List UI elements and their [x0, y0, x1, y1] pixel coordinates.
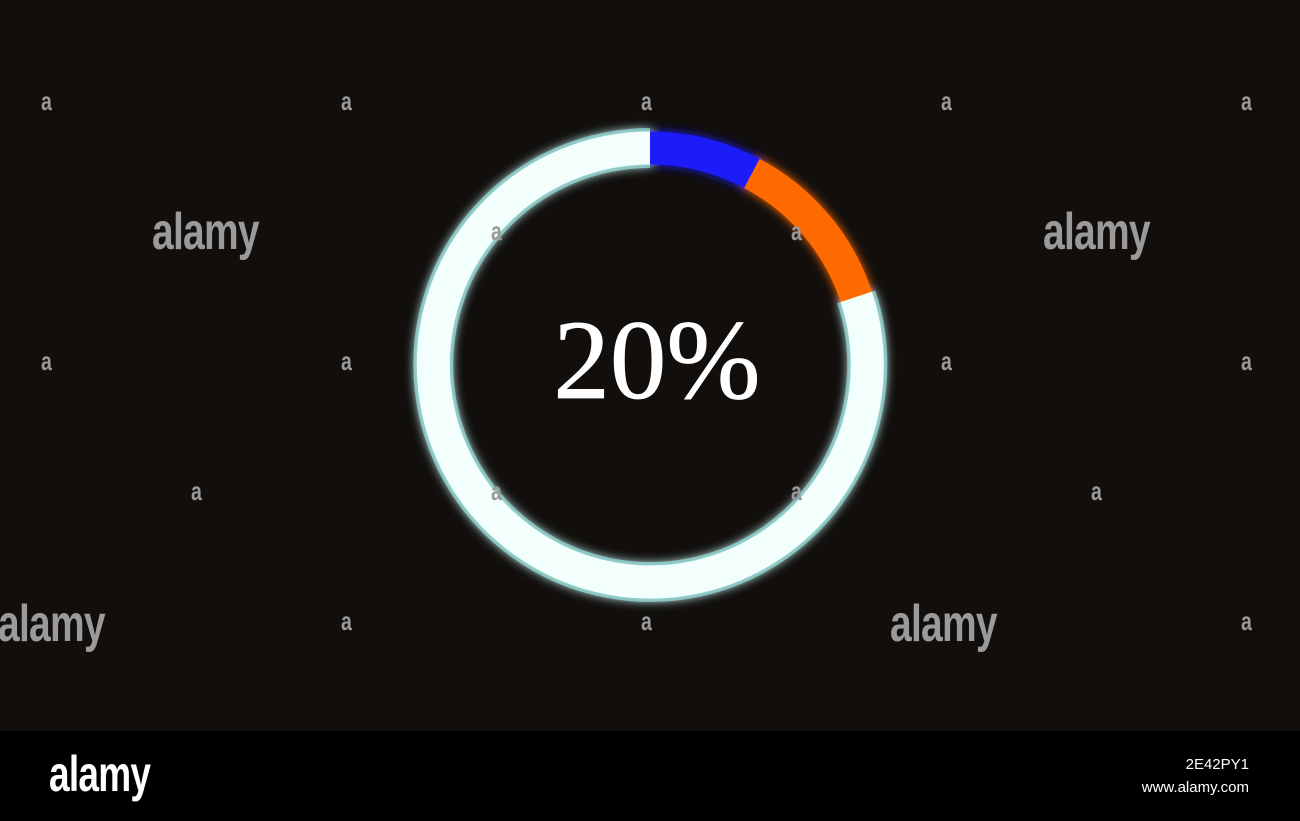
text: alamy	[0, 595, 105, 653]
blue segment	[650, 148, 752, 173]
footer bar	[0, 731, 1300, 821]
text: a	[1241, 606, 1252, 636]
text: alamy	[890, 595, 997, 653]
text: a	[791, 216, 802, 246]
white ring segment	[433, 148, 867, 582]
text: a	[1241, 346, 1252, 376]
footer image id: 2E42PY1	[1186, 756, 1249, 773]
text: alamy	[1043, 203, 1150, 261]
text: a	[1241, 86, 1252, 116]
footer image id	[1142, 756, 1249, 796]
text: a	[641, 606, 652, 636]
watermarks	[0, 86, 1252, 653]
text: a	[1091, 476, 1102, 506]
text: a	[941, 346, 952, 376]
text: a	[341, 606, 352, 636]
text: a	[941, 86, 952, 116]
text: a	[491, 216, 502, 246]
orange segment	[752, 173, 856, 297]
percentage label: 20%	[553, 298, 761, 423]
text: a	[491, 476, 502, 506]
text: a	[41, 346, 52, 376]
text: a	[341, 86, 352, 116]
text: a	[191, 476, 202, 506]
text: a	[341, 346, 352, 376]
text: a	[791, 476, 802, 506]
text: a	[41, 86, 52, 116]
footer logo: alamy	[49, 746, 150, 802]
text: a	[641, 86, 652, 116]
footer image id: www.alamy.com	[1142, 779, 1249, 796]
text: alamy	[152, 203, 259, 261]
